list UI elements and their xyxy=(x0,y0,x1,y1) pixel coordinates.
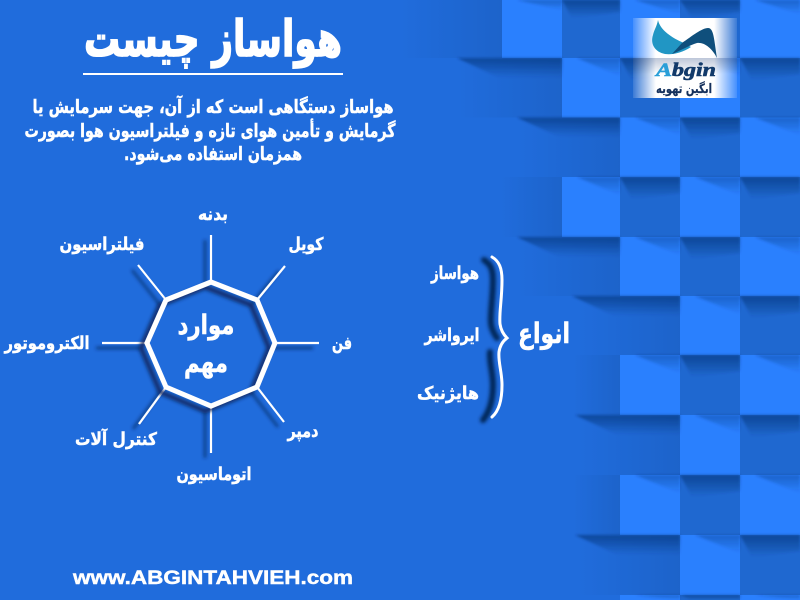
logo xyxy=(633,18,737,98)
spoke labels: فن xyxy=(332,334,352,354)
logo persian name: ابگین تهویه xyxy=(656,81,712,97)
website url: www.ABGINTAHVIEH.com xyxy=(72,568,353,589)
octagon xyxy=(147,282,275,406)
hub label: مهم xyxy=(184,348,228,379)
intro paragraph xyxy=(24,95,396,165)
title: هواساز چیست xyxy=(84,10,342,69)
intro paragraph: گرمایش و تأمین هوای تازه و فیلتراسیون هوا بصورت xyxy=(24,119,396,142)
spoke labels: اتوماسیون xyxy=(176,465,252,485)
spoke labels: فیلتراسیون xyxy=(60,235,144,255)
types list: ایرواشر xyxy=(424,326,480,346)
hub label: موارد xyxy=(178,310,234,341)
intro paragraph: همزمان استفاده می‌شود. xyxy=(124,144,302,165)
logo mark xyxy=(652,20,717,58)
hub label xyxy=(178,310,234,379)
spoke labels: دمپر xyxy=(287,422,319,442)
logo wordmark: Abgin xyxy=(655,60,716,81)
diagram: octagon hub with spokes xyxy=(4,205,352,485)
types list: هواساز xyxy=(430,264,479,284)
curly bracket xyxy=(483,257,507,420)
spoke labels: کنترل آلات xyxy=(75,427,158,450)
spoke labels: الکتروموتور xyxy=(4,334,90,354)
types list: هایژنیک xyxy=(417,384,479,404)
spokes xyxy=(102,235,319,453)
title underline xyxy=(83,73,343,75)
spoke labels: بدنه xyxy=(198,205,228,225)
types heading: انواع xyxy=(518,317,570,350)
types list xyxy=(417,264,480,404)
spoke labels xyxy=(4,205,352,485)
intro paragraph: هواساز دستگاهی است که از آن، جهت سرمایش یا xyxy=(32,95,394,118)
spoke labels: کویل xyxy=(288,235,324,255)
